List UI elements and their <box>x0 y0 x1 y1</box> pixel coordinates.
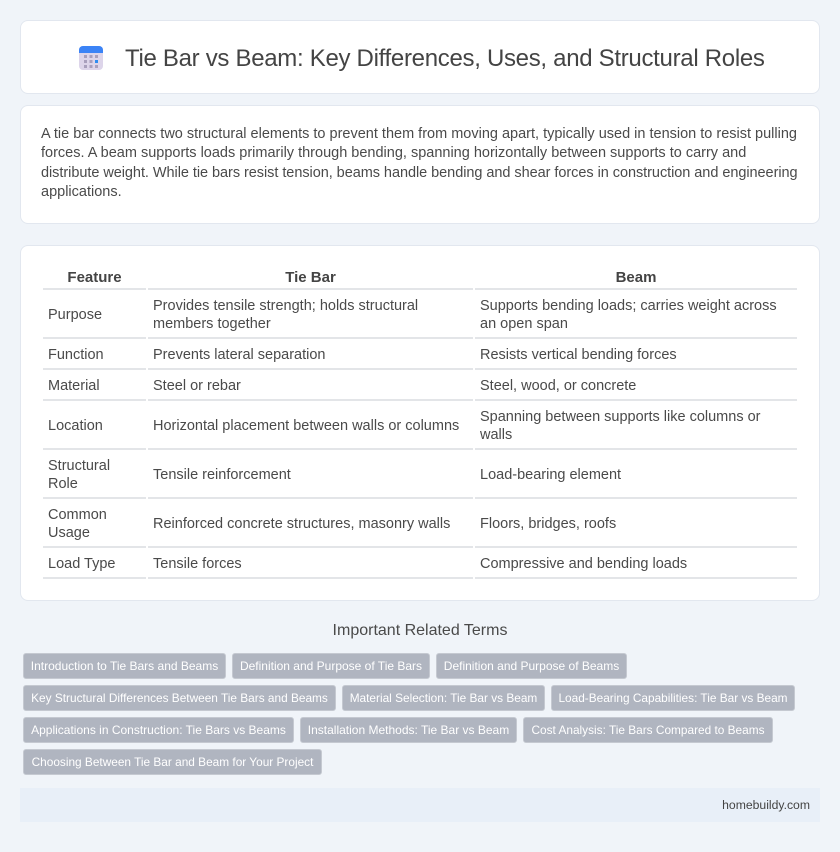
tag: Definition and Purpose of Tie Bars <box>240 659 422 673</box>
Purpose: Beam: an open span <box>480 316 568 332</box>
footer: site name: homebuildy.com <box>722 798 810 812</box>
tag: Introduction to Tie Bars and Beams <box>31 659 218 673</box>
Location: Beam: walls <box>480 427 512 443</box>
Purpose: Beam <box>480 298 777 332</box>
Load Type: Beam: Compressive and bending loads <box>480 556 687 572</box>
row: Structural Role: Role <box>48 476 78 492</box>
header: Tie Bar: Tie Bar <box>285 269 336 286</box>
tag <box>342 685 545 711</box>
row: Common Usage: Usage <box>48 525 90 541</box>
tag: Installation Methods: Tie Bar vs Beam <box>308 723 509 737</box>
tag <box>300 717 517 743</box>
comparison table <box>43 268 797 580</box>
row: Structural Role: Structural <box>48 458 110 474</box>
Function: Tie Bar: Prevents lateral separation <box>153 347 326 363</box>
title: Tie Bar vs Beam: Key Differences, Uses, and Structural Roles <box>125 45 765 72</box>
row: Function: Function <box>48 347 104 363</box>
row: Location: Location <box>48 418 103 434</box>
tag <box>551 685 795 711</box>
intro text: forces. A beam supports loads primarily through bending, spanning horizontally between supports to carry and <box>41 145 746 161</box>
icon: calendar <box>79 46 103 70</box>
Function: Beam: Resists vertical bending forces <box>480 347 677 363</box>
Common Usage: Tie Bar: Reinforced concrete structures, masonry walls <box>153 516 450 532</box>
Material: Beam: Steel, wood, or concrete <box>480 378 636 394</box>
Purpose: Tie Bar: members together <box>153 316 271 332</box>
tag: Definition and Purpose of Beams <box>444 659 619 673</box>
row: Common Usage <box>48 507 107 541</box>
intro text: distribute weight. While tie bars resist tension, beams handle bending and shear forces in construction and engineering <box>41 164 798 180</box>
Load Type: Tie Bar: Tensile forces <box>153 556 242 572</box>
Purpose: Tie Bar <box>153 298 418 332</box>
Material: Tie Bar: Steel or rebar <box>153 378 241 394</box>
footer bar <box>20 788 820 822</box>
row: Material: Material <box>48 378 100 394</box>
panel: comparison table <box>20 245 820 601</box>
tag: Load-Bearing Capabilities: Tie Bar vs Beam <box>558 691 788 705</box>
Structural Role: Beam: Load-bearing element <box>480 467 621 483</box>
Location: Beam: Spanning between supports like columns or <box>480 409 760 425</box>
panel: title card <box>20 20 820 94</box>
row: Purpose: Purpose <box>48 307 102 323</box>
tag: Key Structural Differences Between Tie Bars and Beams <box>31 691 328 705</box>
Purpose: Beam: Supports bending loads; carries weight across <box>480 298 777 314</box>
tag <box>23 717 294 743</box>
tag: Cost Analysis: Tie Bars Compared to Beams <box>531 723 765 737</box>
header: Feature: Feature <box>67 269 122 286</box>
tag <box>436 653 627 679</box>
tag <box>23 749 322 775</box>
row: Common Usage: Common <box>48 507 107 523</box>
heading: related terms: Important Related Terms <box>333 622 507 639</box>
intro text: applications. <box>41 184 122 200</box>
intro text <box>41 126 798 200</box>
intro text: A tie bar connects two structural elements to prevent them from moving apart, typically used in tension to resist pulling <box>41 126 797 142</box>
Location: Tie Bar: Horizontal placement between walls or columns <box>153 418 459 434</box>
header: Beam: Beam <box>616 269 656 286</box>
Location: Beam <box>480 409 760 443</box>
tag <box>23 653 226 679</box>
tag <box>232 653 430 679</box>
Structural Role: Tie Bar: Tensile reinforcement <box>153 467 291 483</box>
tag: Material Selection: Tie Bar vs Beam <box>350 691 537 705</box>
Common Usage: Beam: Floors, bridges, roofs <box>480 516 616 532</box>
row: Structural Role <box>48 458 110 492</box>
panel: intro <box>20 105 820 224</box>
tag <box>23 685 336 711</box>
row: Load Type: Load Type <box>48 556 115 572</box>
Purpose: Tie Bar: Provides tensile strength; holds structural <box>153 298 418 314</box>
tag: Choosing Between Tie Bar and Beam for Your Project <box>32 755 313 769</box>
tag <box>523 717 773 743</box>
tag: Applications in Construction: Tie Bars vs Beams <box>31 723 286 737</box>
